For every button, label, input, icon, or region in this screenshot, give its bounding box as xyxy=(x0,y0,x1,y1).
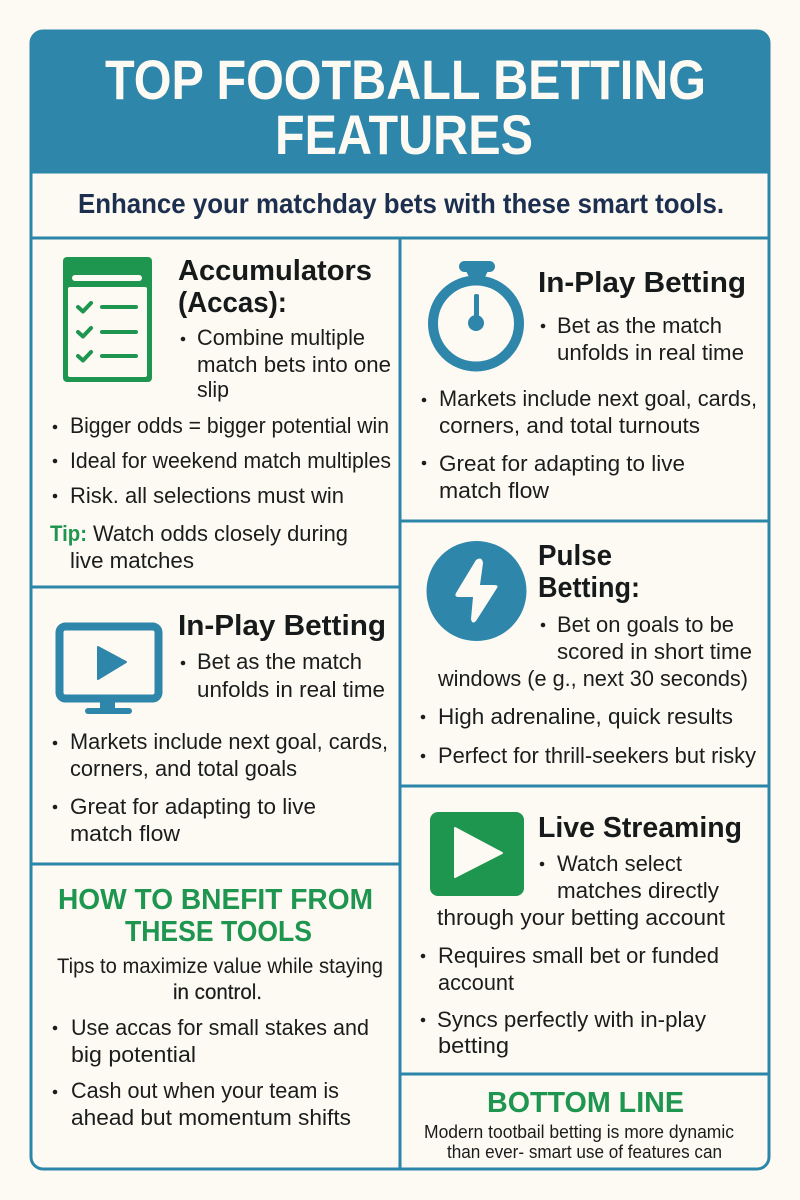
tip: Tip: xyxy=(50,521,87,546)
list: accumulator points: Risk. all selections must win xyxy=(70,483,344,508)
panel: accumulators xyxy=(50,255,391,573)
heading: pulse betting: Pulse xyxy=(538,540,612,572)
list: accumulator points: Combine multiple xyxy=(197,325,365,350)
panel: in-play betting left xyxy=(53,610,388,846)
intro text: Tips to maximize value while staying xyxy=(57,955,383,978)
panel: in-play betting right xyxy=(422,261,757,503)
heading: accumulators: Accumulators xyxy=(178,255,372,287)
list: benefit tips: ahead but momentum shifts xyxy=(71,1105,351,1130)
heading: live streaming: Live Streaming xyxy=(538,812,742,844)
list: benefit tips xyxy=(53,1015,369,1130)
icon: monitor with play xyxy=(60,626,158,714)
heading: in-play betting: In-Play Betting xyxy=(538,267,746,299)
list: accumulator points: Ideal for weekend match multiples xyxy=(70,448,391,473)
list: in-play points: Bet as the match xyxy=(557,313,722,338)
heading: how to benefit: HOW TO BNEFIT FROM xyxy=(58,884,373,916)
heading: accumulators: (Accas): xyxy=(178,287,287,319)
icon: checklist xyxy=(63,257,152,382)
heading: how to benefit: THESE TOOLS xyxy=(125,916,312,948)
tip: live matches xyxy=(70,548,194,573)
tip: Watch odds closely during xyxy=(93,521,348,546)
summary text: Modern tootbail betting is more dynamic xyxy=(424,1122,734,1142)
list: in-play points: Markets include next goal, cards, xyxy=(70,729,388,754)
panel: live streaming xyxy=(421,812,742,1058)
title xyxy=(105,48,706,166)
list: streaming points: betting xyxy=(438,1033,509,1058)
heading: how to benefit xyxy=(58,884,373,948)
title: TOP FOOTBALL BETTING xyxy=(105,48,706,111)
list: accumulator points: match bets into one xyxy=(197,352,391,377)
list: streaming points: Watch select xyxy=(557,851,682,876)
list: pulse points: Perfect for thrill-seekers but risky xyxy=(438,743,756,768)
panel: how to benefit xyxy=(53,884,383,1130)
list: in-play points: Bet as the match xyxy=(197,649,362,674)
list: in-play points: unfolds in real time xyxy=(197,677,385,702)
header banner xyxy=(30,30,770,172)
list: streaming points xyxy=(421,851,725,1058)
list: in-play points: Markets include next goal, cards, xyxy=(439,386,757,411)
intro text: in control. xyxy=(173,981,262,1004)
list: benefit tips: Use accas for small stakes and xyxy=(71,1015,369,1040)
list: in-play points: Great for adapting to live xyxy=(439,451,685,476)
list: pulse points: scored in short time xyxy=(557,639,752,664)
list: in-play points: corners, and total turnouts xyxy=(439,413,700,438)
list: pulse points xyxy=(421,612,756,768)
heading: pulse betting xyxy=(538,540,640,604)
list: in-play points: corners, and total goals xyxy=(70,756,297,781)
list: streaming points: Syncs perfectly with in-play xyxy=(437,1007,706,1032)
list: in-play points: match flow xyxy=(439,478,549,503)
panel: bottom line xyxy=(424,1087,734,1162)
list: streaming points: Requires small bet or funded xyxy=(438,943,719,968)
list: accumulator points: slip xyxy=(197,377,229,402)
heading: accumulators xyxy=(178,255,372,319)
list: accumulator points: Bigger odds = bigger potential win xyxy=(70,413,389,438)
summary text: than ever- smart use of features can xyxy=(447,1142,722,1162)
list: pulse points: windows (e g., next 30 seconds) xyxy=(437,666,748,691)
heading: in-play betting: In-Play Betting xyxy=(178,610,386,642)
list: accumulator points xyxy=(53,325,391,508)
list: in-play points xyxy=(422,313,757,503)
list: streaming points: account xyxy=(438,970,514,995)
icon: lightning bolt xyxy=(426,541,526,641)
list: pulse points: High adrenaline, quick results xyxy=(438,704,733,729)
list: benefit tips: big potential xyxy=(71,1042,196,1067)
heading: bottom line: BOTTOM LINE xyxy=(487,1087,684,1119)
tip xyxy=(50,521,348,573)
list: pulse points: Bet on goals to be xyxy=(557,612,734,637)
list: in-play points: Great for adapting to live xyxy=(70,794,316,819)
icon: green play button xyxy=(430,812,524,896)
list: benefit tips: Cash out when your team is xyxy=(71,1078,339,1103)
summary text xyxy=(424,1122,734,1162)
list: in-play points: match flow xyxy=(70,821,180,846)
panel: pulse betting xyxy=(421,540,756,768)
intro text xyxy=(57,955,383,1004)
icon: stopwatch xyxy=(433,261,519,366)
list: in-play points xyxy=(53,649,388,846)
list: in-play points: unfolds in real time xyxy=(557,340,744,365)
list: streaming points: matches directly xyxy=(557,878,719,903)
list: streaming points: through your betting account xyxy=(437,905,725,930)
heading: pulse betting: Betting: xyxy=(538,572,640,604)
subtitle: Enhance your matchday bets with these smart tools. xyxy=(78,188,724,219)
title: FEATURES xyxy=(275,103,533,166)
